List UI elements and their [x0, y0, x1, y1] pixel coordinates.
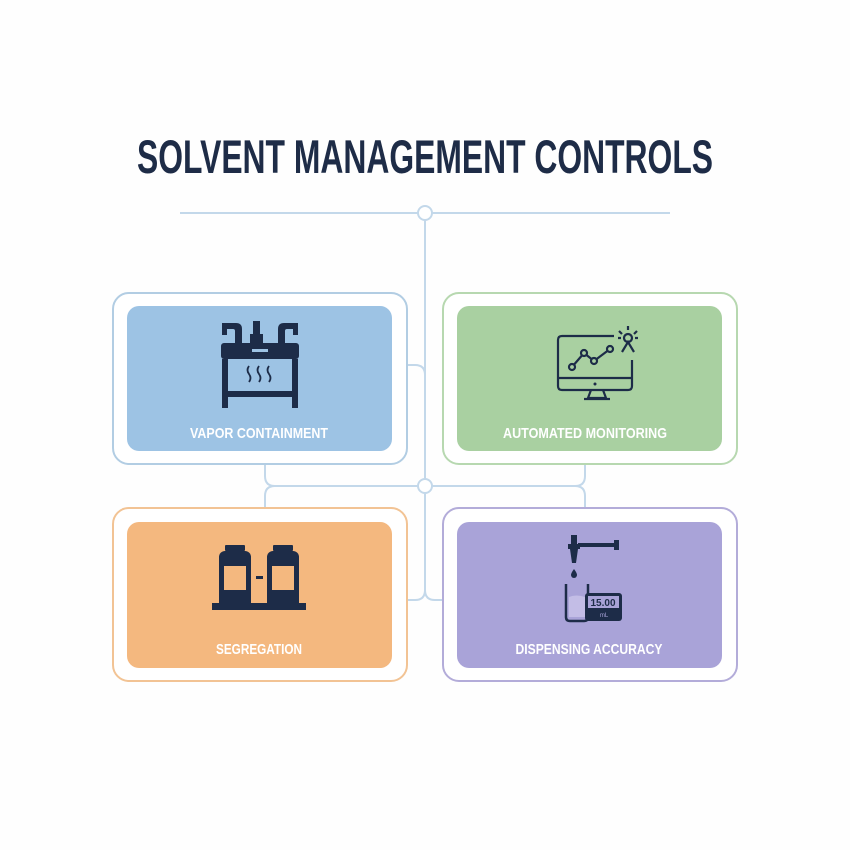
label: VAPOR CONTAINMENT [190, 425, 328, 442]
icon: dispenser [568, 535, 622, 621]
panel: dispensing accuracy: 15.00 [590, 598, 616, 609]
panel: dispensing accuracy: mL [600, 613, 609, 619]
label: SEGREGATION [216, 641, 302, 658]
panel: vapor containment [113, 293, 407, 464]
panel: automated monitoring [443, 293, 737, 464]
panel: dispensing accuracy [443, 508, 737, 681]
connector lines [180, 206, 670, 600]
icon: monitor chart [558, 326, 638, 399]
icon: bottles [212, 545, 306, 610]
label: DISPENSING ACCURACY [516, 641, 662, 658]
icon: fume hood [221, 321, 299, 408]
panel: segregation [113, 508, 407, 681]
label: AUTOMATED MONITORING [503, 425, 667, 442]
